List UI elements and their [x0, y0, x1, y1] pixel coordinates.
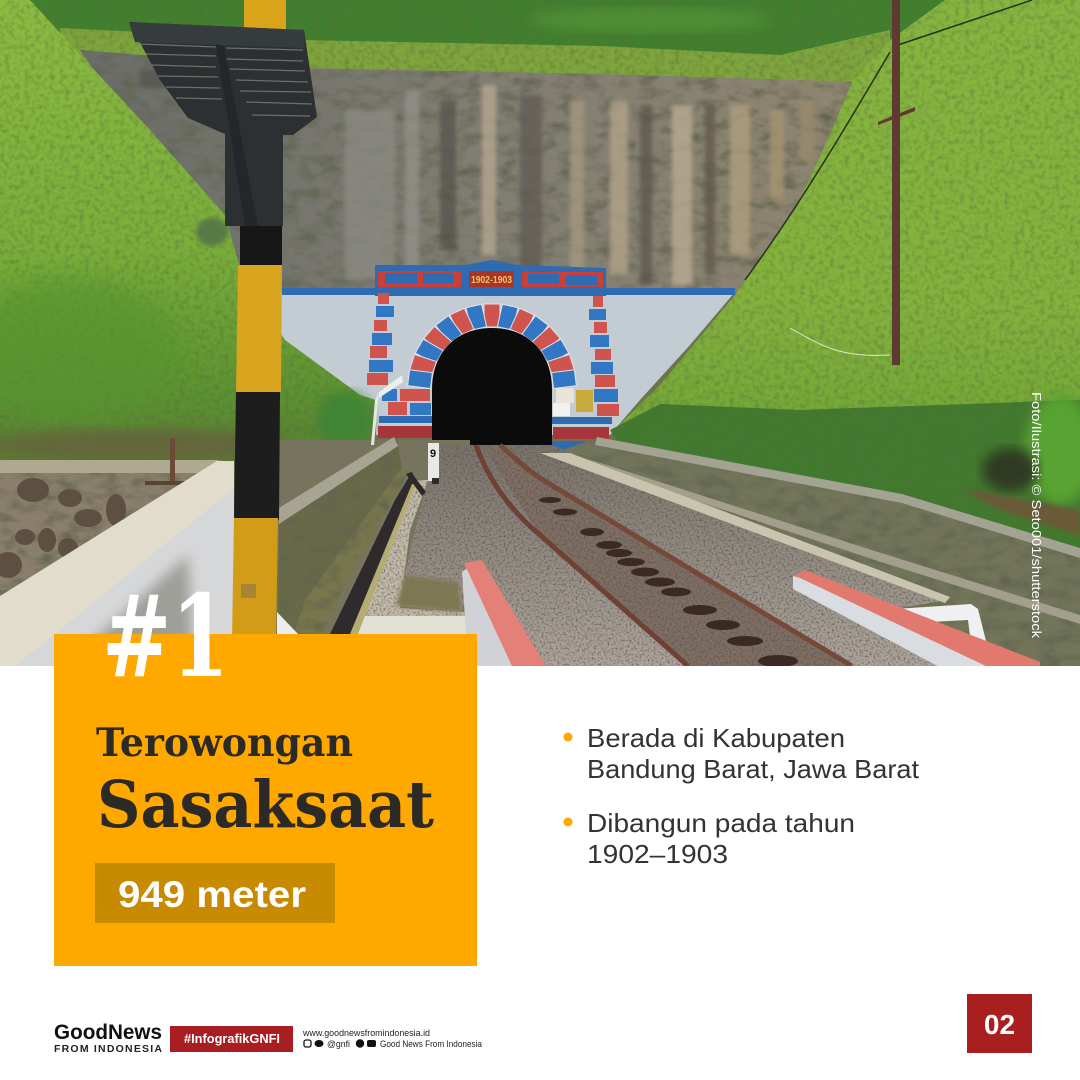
- length badge: [95, 863, 335, 923]
- icon: twitter: [314, 1040, 324, 1047]
- footer logo: FROM INDONESIA: [54, 1043, 162, 1055]
- tunnel mouth: [432, 328, 552, 445]
- bullet: build year: 1902–1903: [587, 839, 728, 869]
- concrete headwall: [80, 50, 865, 300]
- bullet: location: Berada di Kabupaten: [587, 723, 845, 753]
- length badge: 949 meter: [118, 874, 306, 915]
- bullet: location: Bandung Barat, Jawa Barat: [587, 754, 920, 784]
- footer logo: GoodNews: [54, 1021, 162, 1044]
- right ballast edge: [540, 453, 950, 603]
- page number: [967, 994, 1032, 1053]
- km marker: [406, 443, 439, 496]
- right stone retaining wall: [540, 437, 1080, 666]
- footer links: @gnfi: [327, 1039, 350, 1049]
- left stone channel: [277, 437, 416, 634]
- tunnel date plate: 1902-1903: [471, 275, 512, 286]
- rank number: #1: [102, 570, 229, 703]
- footer links: [302, 1028, 482, 1049]
- portal arch bricks: [408, 304, 576, 389]
- photo: Sasaksaat railway tunnel: [0, 0, 1080, 680]
- bullet: build year: Dibangun pada tahun: [587, 808, 855, 838]
- heading: Sasaksaat: Sasaksaat: [97, 767, 434, 843]
- page number: 02: [984, 1009, 1015, 1040]
- left stone wall: [0, 438, 222, 590]
- left grass slope: [0, 0, 376, 500]
- bullet: build year: [564, 808, 855, 869]
- icon: facebook: [356, 1039, 364, 1048]
- portal wall: [240, 292, 735, 435]
- icon: instagram: [304, 1040, 311, 1047]
- photo credit: Foto/Ilustrasi: © Seto001/shutterstock: [1029, 392, 1043, 639]
- grass shading: [0, 218, 373, 482]
- right hedge: [610, 395, 1080, 560]
- concrete walkway: [356, 480, 466, 634]
- signal louvre board: [129, 22, 317, 226]
- tree line: [30, 0, 945, 55]
- hashtag badge: [170, 1026, 293, 1052]
- footer links: www.goodnewsfromindonesia.id: [302, 1028, 430, 1038]
- ballast bed: [400, 445, 940, 666]
- panel: tunnel title card: [54, 570, 477, 966]
- portal pillar bricks: [367, 293, 619, 416]
- footer links: Good News From Indonesia: [380, 1039, 482, 1049]
- portal cornice: [282, 260, 735, 296]
- km marker: 9: [430, 448, 436, 460]
- photo underlay: [0, 214, 952, 666]
- small signpost: [371, 375, 403, 445]
- footer logo: [54, 1021, 162, 1055]
- white parapet: [0, 461, 234, 672]
- ground under walkway: [278, 440, 470, 640]
- rails and sleepers: [476, 445, 852, 667]
- heading: Terowongan: Terowongan: [96, 720, 353, 766]
- hashtag badge: #InfografikGNFI: [184, 1032, 280, 1046]
- right curb: [793, 570, 1040, 666]
- centre curb: [462, 560, 546, 666]
- right grass slope: [612, 0, 1080, 432]
- signal post: [232, 0, 286, 640]
- portal base: [378, 388, 612, 451]
- icon: youtube: [367, 1040, 376, 1047]
- utility pole and wires: [745, 0, 1032, 365]
- bullet: location: [564, 723, 920, 784]
- grass strip above wall: [60, 28, 890, 82]
